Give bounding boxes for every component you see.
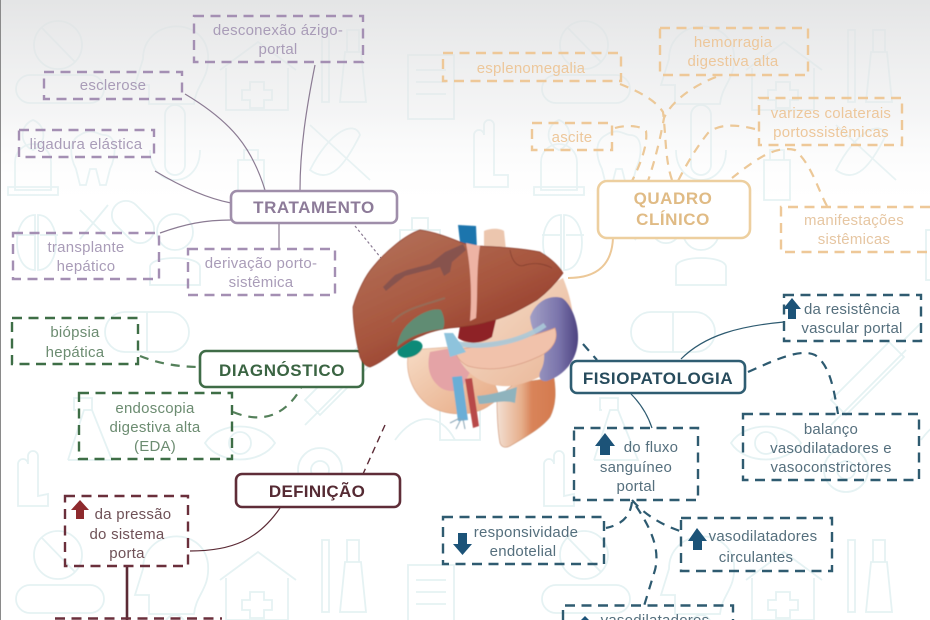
box: derivação porto-sistêmica: sistêmica (229, 274, 294, 291)
box: varizes colaterais portossistêmicas (759, 98, 902, 145)
box: responsividade endotelial: endotelial (490, 543, 556, 560)
box: do fluxo sanguíneo portal: do fluxo (624, 439, 678, 456)
stomach (455, 278, 573, 386)
box: ligadura elástica: ligadura elástica (30, 136, 143, 153)
heading: definição: DEFINIÇÃO (269, 481, 365, 501)
box: endoscopia digestiva alta: endoscopia (115, 400, 195, 417)
box: balanço vasodilatadores e vasoconstrictores (743, 414, 919, 480)
box: balanço vasodilatadores e vasoconstrictores: vasodilatadores e (770, 440, 892, 457)
heading: definição (236, 474, 400, 507)
box: manifestações sistêmicas: sistêmicas (818, 231, 890, 248)
vessel: mesenteric vein (452, 376, 468, 421)
box: do fluxo sanguíneo portal (574, 428, 698, 500)
box: do fluxo sanguíneo portal: sanguíneo (600, 459, 672, 476)
panel: tratamento (13, 16, 397, 295)
box: endoscopia digestiva alta (79, 393, 232, 459)
box: ascite (532, 123, 612, 150)
box: vasodilatadores circulantes (681, 518, 832, 571)
box: manifestações sistêmicas (781, 207, 930, 252)
box: da resistência vascular portal: vascular portal (801, 320, 903, 337)
portal vein (444, 333, 466, 357)
icon: up arrow (581, 616, 589, 620)
box: manifestações sistêmicas: manifestações (804, 212, 904, 229)
panel: diagnóstico (12, 318, 363, 459)
box: biópsia hepática: biópsia (50, 324, 100, 341)
box: esclerose (44, 72, 182, 99)
liver veins (383, 244, 466, 291)
box: bottom definição box (55, 617, 222, 620)
box: biópsia hepática: hepática (46, 344, 105, 361)
box: transplante hepático: hepático (57, 258, 115, 275)
box: endoscopia digestiva alta: digestiva alta (109, 419, 201, 436)
intestine (497, 378, 555, 447)
heading: quadro clínico (598, 181, 750, 238)
connector lines: definição (127, 425, 385, 620)
falciform ligament (466, 243, 480, 321)
heading: quadro clínico: CLÍNICO (636, 210, 710, 229)
box: hemorragia digestiva alta: hemorragia (694, 34, 773, 51)
vessel: aorta (484, 229, 506, 250)
heading: diagnóstico: DIAGNÓSTICO (219, 361, 345, 380)
liver fissure (510, 250, 552, 268)
icon: up arrow (688, 528, 707, 550)
box: desconexão ázigo-portal (194, 16, 363, 62)
box: endoscopia digestiva alta: (EDA) (134, 438, 176, 455)
connector lines: quadro clínico (568, 77, 827, 278)
panel: definição (55, 474, 400, 618)
box: hemorragia digestiva alta: digestiva alta (687, 53, 779, 70)
pancreas body (455, 328, 556, 369)
heading: quadro clínico: QUADRO (634, 189, 712, 208)
heading: tratamento: TRATAMENTO (253, 198, 375, 217)
spleen (530, 297, 578, 381)
box: da resistência vascular portal: da resistência (804, 301, 900, 318)
box: da resistência vascular portal (783, 295, 921, 341)
box: ligadura elástica (19, 130, 154, 157)
panel: fisiopatologia (443, 295, 921, 620)
liver (353, 230, 563, 367)
box: responsividade endotelial (443, 517, 604, 564)
box: desconexão ázigo-portal: desconexão ázigo- (213, 22, 343, 39)
icon: up arrow (595, 433, 615, 455)
illustration: liver, stomach, pancreas, spleen (353, 225, 578, 447)
panel: quadro clínico (443, 28, 930, 252)
box: da pressão do sistema porta: porta (109, 545, 145, 562)
heading: diagnóstico (200, 351, 363, 387)
icon: down arrow (453, 533, 472, 555)
heading: fisiopatologia: FISIOPATOLOGIA (583, 369, 733, 388)
box: esplenomegalia: esplenomegalia (477, 60, 586, 77)
box: do fluxo sanguíneo portal: portal (616, 478, 656, 495)
box: vasodilatadores circulantes: vasodilatadores (709, 528, 817, 545)
connector lines: diagnóstico (140, 356, 301, 417)
box: derivação porto-sistêmica: derivação porto- (205, 255, 317, 272)
box: derivação porto-sistêmica (188, 249, 335, 295)
box: esplenomegalia (443, 53, 621, 81)
box: varizes colaterais portossistêmicas: varizes colaterais (771, 105, 891, 122)
box: da pressão do sistema porta: do sistema (89, 526, 165, 543)
gallbladder (395, 337, 425, 361)
box: da pressão do sistema porta: da pressão (95, 506, 171, 523)
box: responsividade endotelial: responsividade (474, 524, 578, 541)
box: transplante hepático: transplante (48, 239, 124, 256)
icon: red up arrow (71, 500, 89, 519)
box: esclerose: esclerose (80, 77, 146, 94)
box: vasodilatadores circulantes: circulantes (719, 549, 793, 566)
box: bottom fisiopatologia box (563, 606, 733, 620)
box: transplante hepático (13, 233, 159, 279)
box: balanço vasodilatadores e vasoconstrictores: balanço (804, 421, 858, 438)
duodenum (408, 345, 500, 414)
connector lines: tratamento (155, 65, 381, 258)
connector lines: fisiopatologia (583, 322, 838, 606)
box: ascite: ascite (552, 129, 592, 146)
vessel: inferior vena cava (458, 225, 477, 250)
heading: fisiopatologia (571, 361, 745, 393)
box: balanço vasodilatadores e vasoconstrictores: vasoconstrictores (771, 459, 891, 476)
box: varizes colaterais portossistêmicas: portossistêmicas (773, 124, 889, 141)
box: desconexão ázigo-portal: portal (258, 41, 298, 58)
gallbladder shadow (397, 309, 444, 347)
icon: up arrow (783, 298, 801, 319)
pancreas head (428, 348, 470, 391)
celiac region (458, 320, 496, 343)
splenic vein (450, 325, 545, 345)
mesenteric band (477, 387, 517, 404)
vessel: mesenteric artery (465, 378, 479, 428)
box: biópsia hepática (12, 318, 138, 364)
box: da pressão do sistema porta (65, 496, 188, 566)
branches (450, 418, 465, 429)
heading: tratamento (231, 191, 397, 223)
box: hemorragia digestiva alta (660, 28, 808, 75)
